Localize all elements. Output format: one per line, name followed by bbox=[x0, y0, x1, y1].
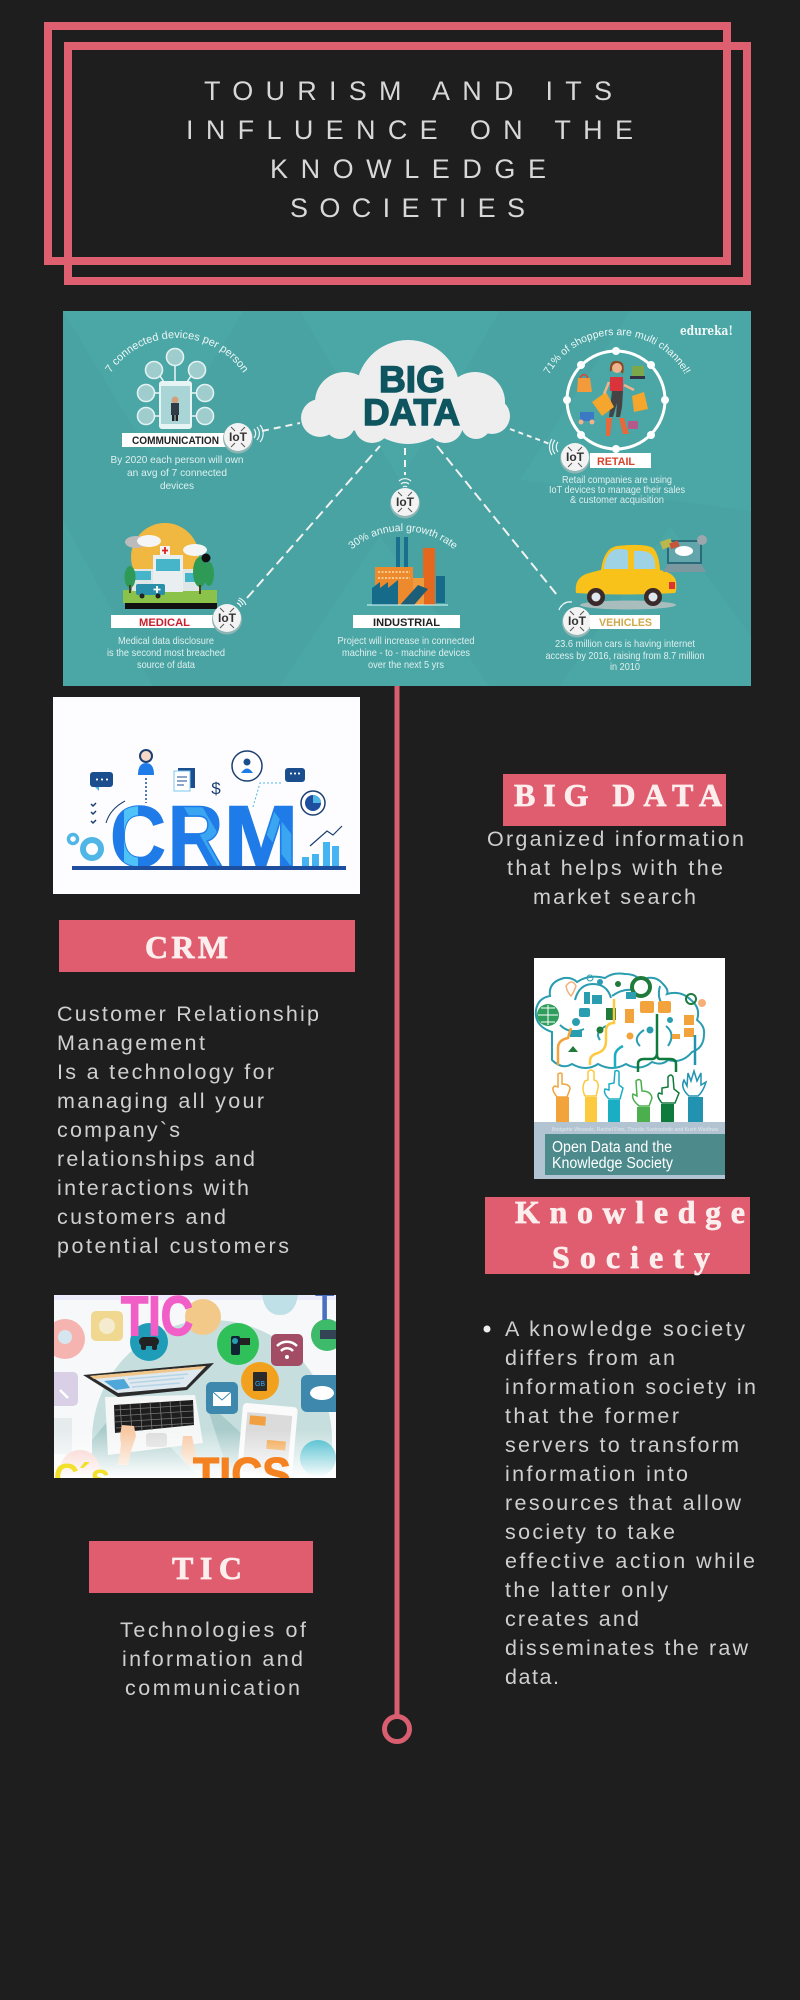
text block: Big Data description bbox=[487, 827, 744, 909]
cover title: Open Data and the bbox=[552, 1139, 672, 1156]
text block: knowledge society bullet: information into bbox=[505, 1462, 688, 1486]
description: Retail companies are using bbox=[562, 474, 672, 486]
text block: knowledge society bullet: information society in bbox=[505, 1375, 756, 1399]
description bbox=[107, 635, 225, 671]
icon: wifi tile bbox=[271, 1334, 303, 1366]
text block: CRM description: potential customers bbox=[57, 1234, 289, 1258]
icon: pie chart bbox=[301, 791, 325, 815]
retail section: RETAIL bbox=[597, 456, 635, 468]
text block: knowledge society bullet: creates and bbox=[505, 1607, 639, 1631]
icon: camera circle right bbox=[311, 1319, 336, 1351]
icon: arc near C bbox=[106, 801, 125, 823]
heading banner: Big Data bbox=[503, 774, 726, 826]
title text: SOCIETIES bbox=[290, 193, 525, 223]
text block: CRM description: Customer Relationship bbox=[57, 1002, 319, 1026]
communication section: COMMUNICATION bbox=[132, 435, 219, 447]
icon: game controller circle bbox=[130, 1323, 168, 1361]
icon: laptop with hands bbox=[83, 1363, 214, 1465]
text block: CRM description bbox=[57, 1002, 319, 1258]
curved caption: 30% annual growth rate bbox=[348, 523, 456, 548]
icon: ring bbox=[563, 347, 669, 453]
dashed connector lines bbox=[247, 423, 557, 598]
cover title bbox=[552, 1139, 673, 1172]
orange TICS lettering: TICS bbox=[193, 1448, 291, 1500]
icon: cloud tile bbox=[301, 1375, 336, 1412]
icon: shopper woman with bags bbox=[577, 361, 648, 436]
heading banner: CRM: CRM bbox=[145, 929, 228, 965]
description: over the next 5 yrs bbox=[368, 659, 444, 671]
faded background icons bbox=[54, 1295, 298, 1472]
text block: knowledge society bullet: that the former bbox=[505, 1404, 679, 1428]
cloud heading: BIG bbox=[379, 359, 445, 400]
baseline bar bbox=[72, 866, 346, 870]
icon: device ring bbox=[138, 348, 214, 424]
industrial section bbox=[338, 478, 475, 671]
icon: IoT badge bbox=[390, 488, 420, 518]
icon: factory bbox=[367, 537, 448, 605]
big data cloud bbox=[301, 340, 510, 444]
icon: laptop with cloud bbox=[660, 535, 707, 572]
icon: IoT badge: IoT bbox=[218, 611, 237, 625]
text block: knowledge society bullet: resources that allow bbox=[505, 1491, 741, 1515]
label bar bbox=[590, 453, 651, 468]
icon: bar chart bbox=[302, 826, 342, 866]
icon: pen circle bbox=[300, 1440, 336, 1476]
label bar bbox=[122, 433, 230, 447]
pink TIC lettering: TIC bbox=[121, 1284, 193, 1347]
medical section bbox=[107, 523, 246, 671]
text block: knowledge society bullet: disseminates the raw bbox=[505, 1636, 748, 1660]
text block: knowledge society bullet: A knowledge society bbox=[505, 1317, 745, 1341]
heading banner: TIC bbox=[89, 1541, 313, 1593]
text block: TIC description: Technologies of bbox=[120, 1618, 306, 1642]
retail section bbox=[543, 329, 691, 506]
description bbox=[110, 454, 244, 492]
icon: person bbox=[138, 750, 154, 803]
text block: TIC description bbox=[120, 1618, 306, 1700]
cover title: Knowledge Society bbox=[552, 1155, 673, 1172]
text block: Big Data description: that helps with the bbox=[507, 856, 723, 880]
description: Medical data disclosure bbox=[118, 635, 214, 647]
heading banner: CRM bbox=[59, 920, 355, 972]
panel: Open Data book cover bbox=[534, 958, 725, 1179]
icon: memory card circle bbox=[241, 1362, 279, 1400]
label bar bbox=[353, 615, 460, 628]
CRM letters bbox=[110, 789, 298, 885]
icon cloud network bbox=[536, 974, 704, 1068]
medical section: MEDICAL bbox=[139, 617, 190, 629]
hands and sleeves bbox=[553, 1070, 706, 1122]
title text: INFLUENCE ON THE bbox=[186, 115, 633, 145]
description bbox=[338, 635, 475, 671]
label bar bbox=[111, 615, 215, 628]
bottom fade bbox=[54, 1430, 336, 1478]
communication section bbox=[104, 330, 264, 492]
description: IoT devices to manage their sales bbox=[549, 484, 685, 496]
panel: TIC illustration bbox=[54, 1295, 336, 1478]
panel: CRM illustration bbox=[53, 697, 360, 894]
description: machine - to - machine devices bbox=[342, 647, 470, 659]
icon: yellow car bbox=[576, 545, 676, 610]
icon: video camera circle bbox=[217, 1323, 259, 1365]
industrial section: INDUSTRIAL bbox=[373, 617, 440, 629]
description bbox=[549, 474, 685, 506]
authors line: Bridgette Wessels, Rachel Finn, Thordis Sveinsdottir and Kush Wadhwa bbox=[552, 1127, 719, 1133]
icon: memory card circle: GB bbox=[255, 1381, 265, 1388]
icon: IoT badge: IoT bbox=[396, 495, 415, 509]
panel: big data IoT banner image bbox=[63, 311, 751, 686]
icon: IoT badge: IoT bbox=[566, 450, 585, 464]
frame: back rectangle bbox=[48, 26, 727, 261]
text block: CRM description: managing all your bbox=[57, 1089, 264, 1113]
icon: mail tile bbox=[206, 1382, 238, 1414]
icon: hospital scene bbox=[123, 523, 217, 609]
icons inside cloud bbox=[537, 975, 706, 1052]
curved caption: 71% of shoppers are multi channel! bbox=[543, 329, 691, 374]
text block: knowledge society bullet: data. bbox=[505, 1665, 559, 1689]
icon: IoT badge bbox=[212, 604, 242, 634]
text block: CRM description: interactions with bbox=[57, 1176, 249, 1200]
heading banner: Knowledge Society bbox=[485, 1194, 750, 1275]
description: devices bbox=[160, 480, 194, 492]
description: 23.6 million cars is having internet bbox=[555, 638, 695, 650]
icon: phone with man bbox=[159, 381, 192, 429]
title text bbox=[186, 76, 633, 223]
heading banner: Knowledge Society: Knowledge bbox=[515, 1194, 745, 1230]
blue lettering: TI bbox=[315, 1282, 343, 1329]
title block with double frame bbox=[48, 26, 747, 281]
heading banner: Knowledge Society: Society bbox=[552, 1239, 710, 1275]
text block: knowledge society bullet bbox=[484, 1317, 756, 1689]
icon: gears bbox=[68, 834, 101, 858]
text block: knowledge society bullet: servers to transform bbox=[505, 1433, 739, 1457]
edureka logo text: edureka! bbox=[680, 324, 733, 339]
description: in 2010 bbox=[610, 661, 640, 673]
description: By 2020 each person will own bbox=[110, 454, 244, 466]
text block: Big Data description: market search bbox=[533, 885, 696, 909]
yellow lettering: IC´s bbox=[44, 1457, 110, 1499]
description: an avg of 7 connected bbox=[127, 467, 227, 479]
CRM letters: R bbox=[168, 789, 223, 885]
text block: CRM description: company`s bbox=[57, 1118, 180, 1142]
text block: knowledge society bullet: society to take bbox=[505, 1520, 675, 1544]
heading banner: Big Data: BIG DATA bbox=[514, 777, 722, 813]
CRM letters: M bbox=[224, 789, 298, 885]
teal dome bbox=[92, 1320, 332, 1470]
icon: tablet bbox=[238, 1403, 298, 1474]
icon: IoT badge: IoT bbox=[568, 614, 587, 628]
text block: TIC description: communication bbox=[125, 1676, 300, 1700]
data paths from hands bbox=[558, 999, 695, 1072]
timeline vertical line and end circle bbox=[384, 686, 410, 1742]
description: source of data bbox=[137, 659, 195, 671]
description: & customer acquisition bbox=[570, 494, 664, 506]
title text: KNOWLEDGE bbox=[270, 154, 546, 184]
text block: knowledge society bullet: differs from an bbox=[505, 1346, 675, 1370]
icon: chat bubble right bbox=[253, 768, 305, 807]
vehicles section: VEHICLES bbox=[599, 617, 652, 629]
heading banner: TIC: TIC bbox=[172, 1550, 242, 1586]
description: is the second most breached bbox=[107, 647, 225, 659]
text block: CRM description: Management bbox=[57, 1031, 205, 1055]
text block: CRM description: customers and bbox=[57, 1205, 226, 1229]
text block: TIC description: information and bbox=[122, 1647, 303, 1671]
description bbox=[546, 638, 705, 673]
icon: document bbox=[174, 768, 195, 791]
text block: CRM description: relationships and bbox=[57, 1147, 255, 1171]
label bar bbox=[590, 615, 660, 629]
description: access by 2016, raising from 8.7 million bbox=[546, 650, 705, 662]
cover footer band bbox=[534, 1122, 725, 1179]
frame: front rectangle bbox=[68, 46, 747, 281]
icon: IoT badge bbox=[223, 423, 253, 454]
big data cloud: DATA bbox=[363, 392, 460, 433]
text block: knowledge society bullet: effective action while bbox=[505, 1549, 755, 1573]
icon: IoT badge bbox=[562, 607, 592, 638]
curved caption: 7 connected devices per person bbox=[104, 330, 248, 373]
title text: TOURISM AND ITS bbox=[204, 76, 612, 106]
icon: IoT badge bbox=[560, 443, 590, 474]
icon: checks bbox=[91, 803, 96, 823]
icon: dollar: $ bbox=[211, 779, 221, 798]
icon: IoT badge: IoT bbox=[229, 430, 248, 444]
icon: chat bubble left bbox=[90, 772, 113, 791]
description: Project will increase in connected bbox=[338, 635, 475, 647]
text block: Big Data description: Organized information bbox=[487, 827, 744, 851]
text block: CRM description: Is a technology for bbox=[57, 1060, 274, 1084]
icon: person circle bbox=[232, 751, 262, 781]
text block: knowledge society bullet: the latter only bbox=[505, 1578, 668, 1602]
CRM letters: C bbox=[110, 789, 166, 885]
vehicles section bbox=[546, 535, 707, 673]
